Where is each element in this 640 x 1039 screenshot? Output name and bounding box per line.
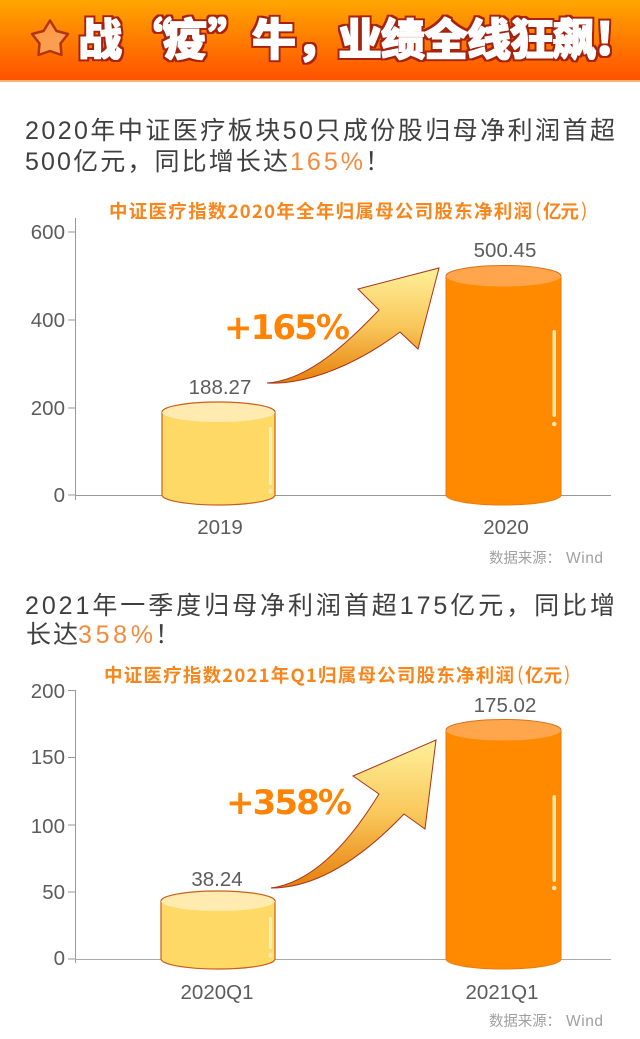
y axis: 600 bbox=[31, 221, 65, 244]
bar: 2021Q1 bbox=[446, 720, 561, 969]
title: ! bbox=[596, 4, 613, 68]
source note: Wind bbox=[566, 1013, 603, 1030]
title: 狂 bbox=[510, 4, 554, 68]
text block: 2021 Q1 summary: ！ bbox=[155, 621, 180, 649]
source note: 数据来源： bbox=[489, 1013, 561, 1030]
category labels: 2020 bbox=[483, 516, 529, 539]
y axis: 0 bbox=[54, 484, 65, 507]
source note bbox=[489, 550, 603, 567]
chart title: ( bbox=[517, 660, 523, 687]
title: 绩 bbox=[381, 4, 425, 68]
title: 疫 bbox=[163, 4, 207, 68]
growth label: +358% bbox=[226, 783, 352, 823]
text block: 2021 Q1 summary bbox=[25, 592, 615, 649]
category labels: 2020Q1 bbox=[181, 981, 253, 1004]
text block: 2020 summary: ！ bbox=[365, 148, 390, 176]
category labels: 2019 bbox=[197, 516, 243, 539]
source note: Wind bbox=[566, 550, 603, 567]
chart title: ) bbox=[564, 660, 570, 687]
icon: star bbox=[32, 20, 68, 55]
text block: 2020 summary: 500亿元，同比增长达 bbox=[25, 148, 288, 176]
arrow: growth bbox=[271, 740, 436, 888]
title: 业 bbox=[338, 4, 382, 68]
title: 线 bbox=[467, 4, 511, 68]
chart title: 亿元 bbox=[525, 662, 562, 688]
x axis baseline bbox=[75, 958, 611, 960]
source note: 数据来源： bbox=[489, 550, 561, 567]
chart title: ) bbox=[581, 196, 587, 223]
chart title: 中证医疗指数2021年Q1归属母公司股东净利润 bbox=[104, 662, 514, 688]
text block: 2021 Q1 summary: 长达 bbox=[26, 621, 78, 649]
text block: 2020 summary bbox=[25, 117, 615, 176]
value labels: 38.24 bbox=[191, 868, 243, 891]
y axis: 200 bbox=[31, 397, 65, 420]
panel: 2020 chart bbox=[31, 196, 611, 567]
text block: 2020 summary: 2020年中证医疗板块50只成份股归母净利润首超 bbox=[25, 117, 615, 145]
y axis: 150 bbox=[31, 746, 65, 769]
title: 战 bbox=[78, 4, 122, 68]
value labels: 175.02 bbox=[474, 694, 536, 717]
title: 飙 bbox=[552, 4, 596, 68]
category labels: 2021Q1 bbox=[466, 981, 538, 1004]
text block: 2021 Q1 summary: 358% bbox=[78, 621, 153, 649]
text block: 2021 Q1 summary: 2021年一季度归母净利润首超175亿元，同比增 bbox=[25, 592, 615, 620]
bar: 2020 bbox=[446, 266, 561, 505]
category labels bbox=[197, 516, 529, 539]
header banner bbox=[0, 0, 640, 82]
title: ， bbox=[296, 4, 340, 68]
value labels: 500.45 bbox=[474, 239, 536, 262]
title: ” bbox=[208, 4, 252, 68]
x axis baseline bbox=[75, 494, 611, 496]
arrow: growth bbox=[267, 268, 439, 383]
title: “ bbox=[128, 4, 172, 68]
title: 全 bbox=[424, 4, 468, 68]
bar: 2019 bbox=[162, 402, 275, 505]
category labels bbox=[181, 981, 538, 1004]
chart title: ( bbox=[535, 196, 541, 223]
bar: 2020Q1 bbox=[161, 891, 275, 969]
chart title: 中证医疗指数2020年全年归属母公司股东净利润 bbox=[109, 198, 532, 224]
chart title: 亿元 bbox=[543, 198, 579, 224]
growth label: +165% bbox=[224, 308, 350, 348]
value labels bbox=[191, 694, 536, 891]
source note bbox=[489, 1013, 603, 1030]
y axis: 100 bbox=[31, 815, 65, 838]
y axis: 50 bbox=[42, 881, 65, 904]
y axis bbox=[31, 218, 76, 507]
y axis bbox=[31, 680, 76, 970]
panel: 2021 Q1 chart bbox=[31, 660, 611, 1030]
y axis: 400 bbox=[31, 309, 65, 332]
value labels bbox=[189, 239, 536, 399]
text block: 2020 summary: 165% bbox=[290, 148, 363, 176]
y axis: 0 bbox=[54, 947, 65, 970]
y axis: 200 bbox=[31, 680, 65, 703]
title: 牛 bbox=[252, 4, 296, 68]
value labels: 188.27 bbox=[189, 376, 251, 399]
